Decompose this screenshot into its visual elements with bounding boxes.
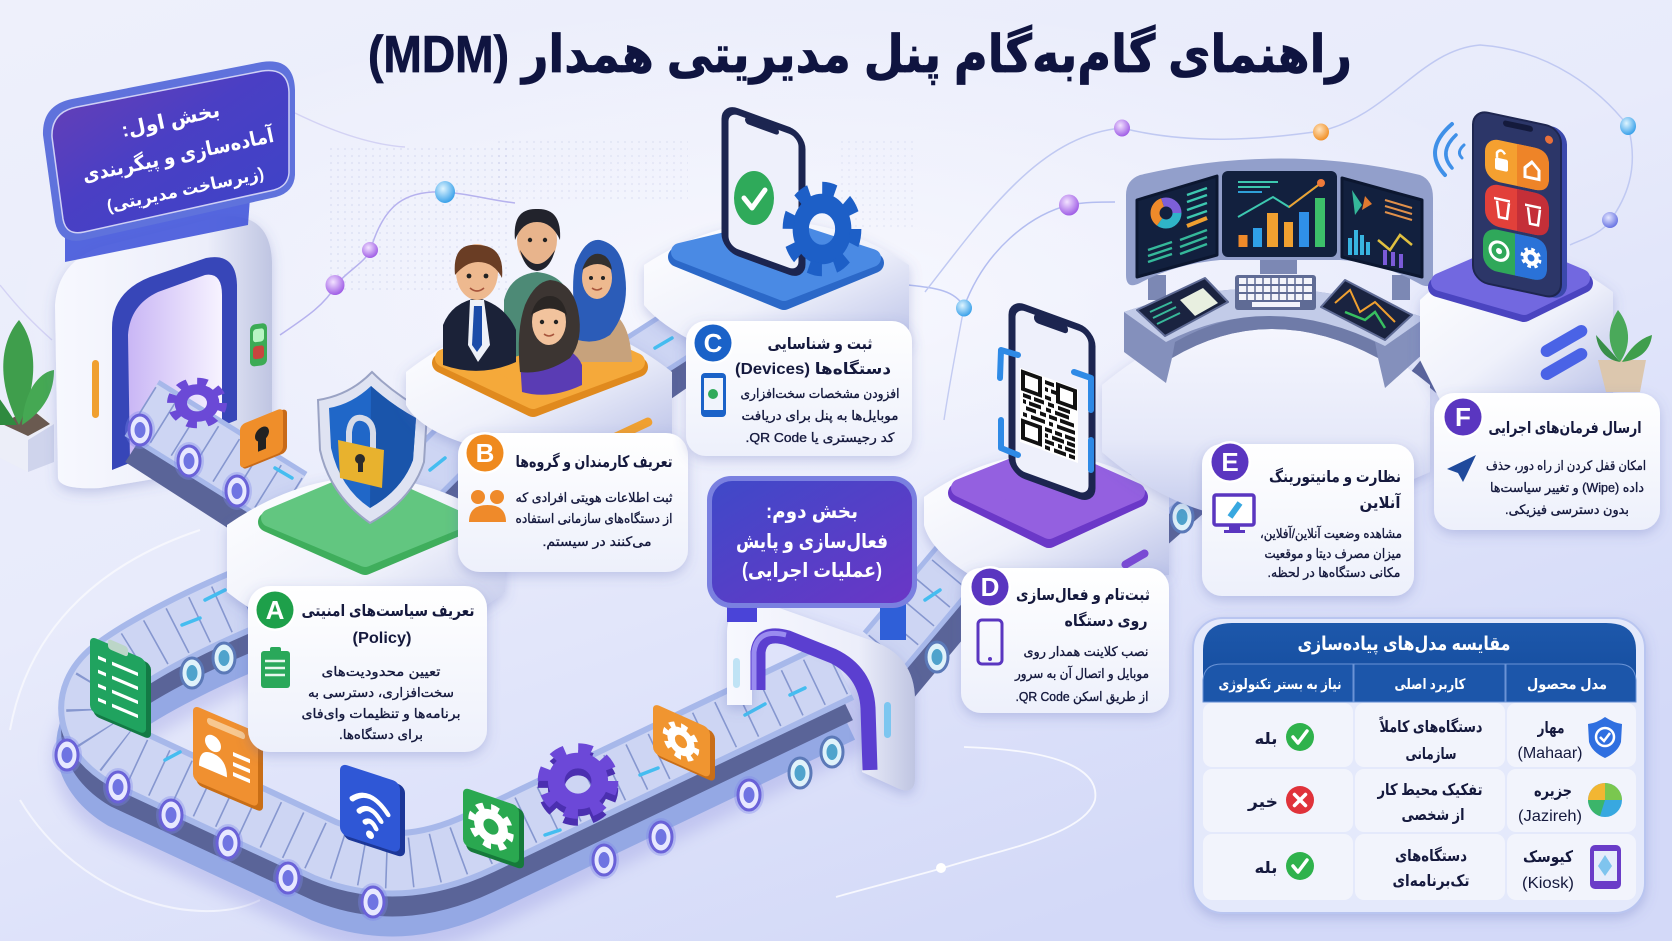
card A [248,586,487,752]
badge A [254,589,296,631]
icon: phone with check [725,107,802,276]
section 1 label [43,61,295,262]
conveyor: platform A to B [410,430,470,510]
icon: people [469,490,506,522]
platform B: orange with people [406,209,672,445]
icon: purple gear on belt [543,749,613,820]
row: Mahaar: مهار [1537,720,1564,737]
row: Jazireh: (Jazireh) [1518,808,1582,825]
body text F: بدون دسترسی فیزیکی. [1505,502,1629,518]
badge A: A [266,595,285,625]
row: Kiosk [1203,834,1636,900]
body text F: امکان قفل کردن از راه دور، حذف [1486,458,1646,474]
body text F [1486,458,1646,518]
icon tile: orange profile [193,705,263,813]
conveyor: main U-shaped belt [52,590,843,921]
monitor array [1126,158,1433,286]
body text C: افزودن مشخصات سخت‌افزاری [740,386,900,402]
body text D [1014,644,1149,705]
icon: wireless waves [1435,124,1464,175]
body text C: کد رجیستری یا QR Code. [746,430,895,446]
body text D: موبایل و اتصال آن به سرور [1014,665,1149,682]
icon: blue gear [788,188,856,270]
row: Kiosk: بله [1254,860,1278,877]
icon: phone [701,373,726,417]
body text E: مشاهده وضعیت آنلاین/آفلاین، [1260,525,1402,542]
icon: phone with action buttons [1473,110,1567,301]
conveyor: platform E to F [1425,335,1487,405]
row: Mahaar: (Mahaar) [1518,745,1582,762]
row: Jazireh [1203,769,1636,832]
row: Kiosk: تک‌برنامه‌ای [1392,873,1470,890]
gate 1 items on belt [171,381,287,471]
platform A: green with shield [227,372,505,642]
icon tile: orange gear [653,703,715,783]
section 1 label: بخش اول: [120,100,222,142]
QR code [1020,368,1078,463]
card E [1202,441,1414,596]
desk [1124,288,1425,388]
badge D [969,566,1011,608]
table header cells [1203,664,1636,702]
icon: phone [978,620,1002,664]
centre screen: bar chart [1238,179,1325,247]
card A: (Policy) [352,630,412,647]
conveyor: platform D to E [1130,440,1215,540]
row: Kiosk: دستگاه‌های [1395,846,1467,865]
icon: clipboard [261,647,290,688]
body text A: برای دستگاه‌ها. [339,727,423,743]
section 1 label: (زیرساخت مدیریتی) [105,164,266,217]
badge E [1209,441,1251,483]
card C [686,321,912,456]
platform D: purple with QR phone [924,303,1169,575]
right tablet [1321,280,1412,340]
body text C: موبایل‌ها به پنل برای دریافت [742,408,898,424]
section 2 label: فعال‌سازی و پایش [736,531,888,554]
table header cells: مدل محصول [1527,677,1607,693]
section 2 label: (عملیات اجرایی) [742,560,882,582]
icon tile: blue wifi [340,763,405,858]
body text D: از طریق اسکن QR Code. [1016,689,1148,705]
badge B: B [476,438,494,468]
row: Kiosk: (Kiosk) [1522,875,1574,892]
card B [458,432,688,572]
card E: آنلاین [1360,492,1401,512]
left screen: donut [1148,188,1207,262]
table header cells: نیاز به بستر تکنولوژی [1218,677,1342,693]
icon tile: green gear [463,787,524,870]
card E: نظارت و مانیتورینگ [1269,467,1401,486]
icon: monitor [1214,495,1254,533]
body text B [516,490,673,550]
conveyor: platform B to C [630,320,705,390]
card A: تعریف سیاست‌های امنیتی [302,603,474,620]
card D: روی دستگاه [1064,611,1148,630]
body text E: میزان مصرف دیتا و موقعیت [1264,546,1402,562]
section 1 label: آماده‌سازی و پیگربندی [80,122,277,188]
row: Jazireh: تفکیک محیط کار [1377,782,1482,799]
comparison table [1193,618,1645,913]
body text A: برنامه‌ها و تنظیمات وای‌فای [302,706,460,722]
platform C: blue with phone and gear [644,107,909,345]
badge C: C [704,328,723,358]
row: Mahaar: دستگاه‌های کاملاً [1379,716,1482,736]
body text A: تعیین محدودیت‌های [322,664,441,680]
row: Mahaar [1203,703,1636,767]
row: Kiosk: کیوسک [1523,849,1574,866]
gate 1 arch [55,216,272,488]
card D [961,566,1169,713]
body text A [302,664,460,743]
people group [443,209,632,395]
platform E: monitoring console [1102,158,1433,520]
row: Jazireh: جزیره [1534,783,1572,800]
card F [1434,393,1660,530]
card B: تعریف کارمندان و گروه‌ها [516,452,672,471]
body text D: نصب کلاینت همدار روی [1024,644,1148,660]
plant right [1596,310,1652,392]
badge F: F [1455,402,1471,432]
row: Jazireh: از شخصی [1402,807,1464,824]
row: Mahaar: بله [1254,731,1278,748]
gate 2 arch [727,603,915,790]
badge F [1442,396,1484,438]
body text B: می‌کنند در سیستم. [542,534,652,550]
conveyor: gate 2 to platform D [885,555,970,680]
section 2 label: بخش دوم: [766,501,858,523]
badge C [692,322,734,364]
card C: دستگاه‌ها (Devices) [735,359,891,378]
body text C [740,386,900,446]
body text F: داده (Wipe) و تغییر سیاست‌ها [1490,480,1644,496]
row: Jazireh: خیر [1247,794,1278,811]
body text B: ثبت اطلاعات هویتی افرادی که [516,490,673,506]
body text A: سخت‌افزاری، دسترسی به [308,685,454,701]
keyboard [1235,275,1316,310]
card C: ثبت و شناسایی [768,336,872,353]
title: راهنمای گام‌به‌گام پنل مدیریتی همدار (MDM) [368,24,1352,85]
card D: ثبت‌تام و فعال‌سازی [1016,587,1150,604]
icon: security shield with padlock [318,372,427,523]
icon: phone with QR code [1000,303,1092,500]
row: Mahaar: سازمانی [1406,746,1456,763]
conveyor: gate 1 to platform A [125,408,292,528]
status stripes [1538,323,1590,382]
plant left [0,320,54,472]
connector curves with nodes [0,45,1636,420]
badge D: D [981,572,999,602]
icon tile: green checklist [90,631,151,740]
icon: paper plane [1447,455,1476,482]
section 2 label [707,476,917,640]
body text E [1260,525,1402,581]
badge E: E [1221,447,1239,477]
platform F: phone with commands [1420,110,1613,400]
body text E: مکانی دستگاه‌ها در لحظه. [1268,565,1400,581]
table header cells: کاربرد اصلی [1394,677,1466,693]
right screen: charts [1350,190,1412,268]
body text B: از دستگاه‌های سازمانی استفاده [516,511,672,527]
badge B [464,432,506,474]
left tablet [1137,278,1228,336]
comparison table: مقایسه مدل‌های پیاده‌سازی [1298,634,1510,655]
